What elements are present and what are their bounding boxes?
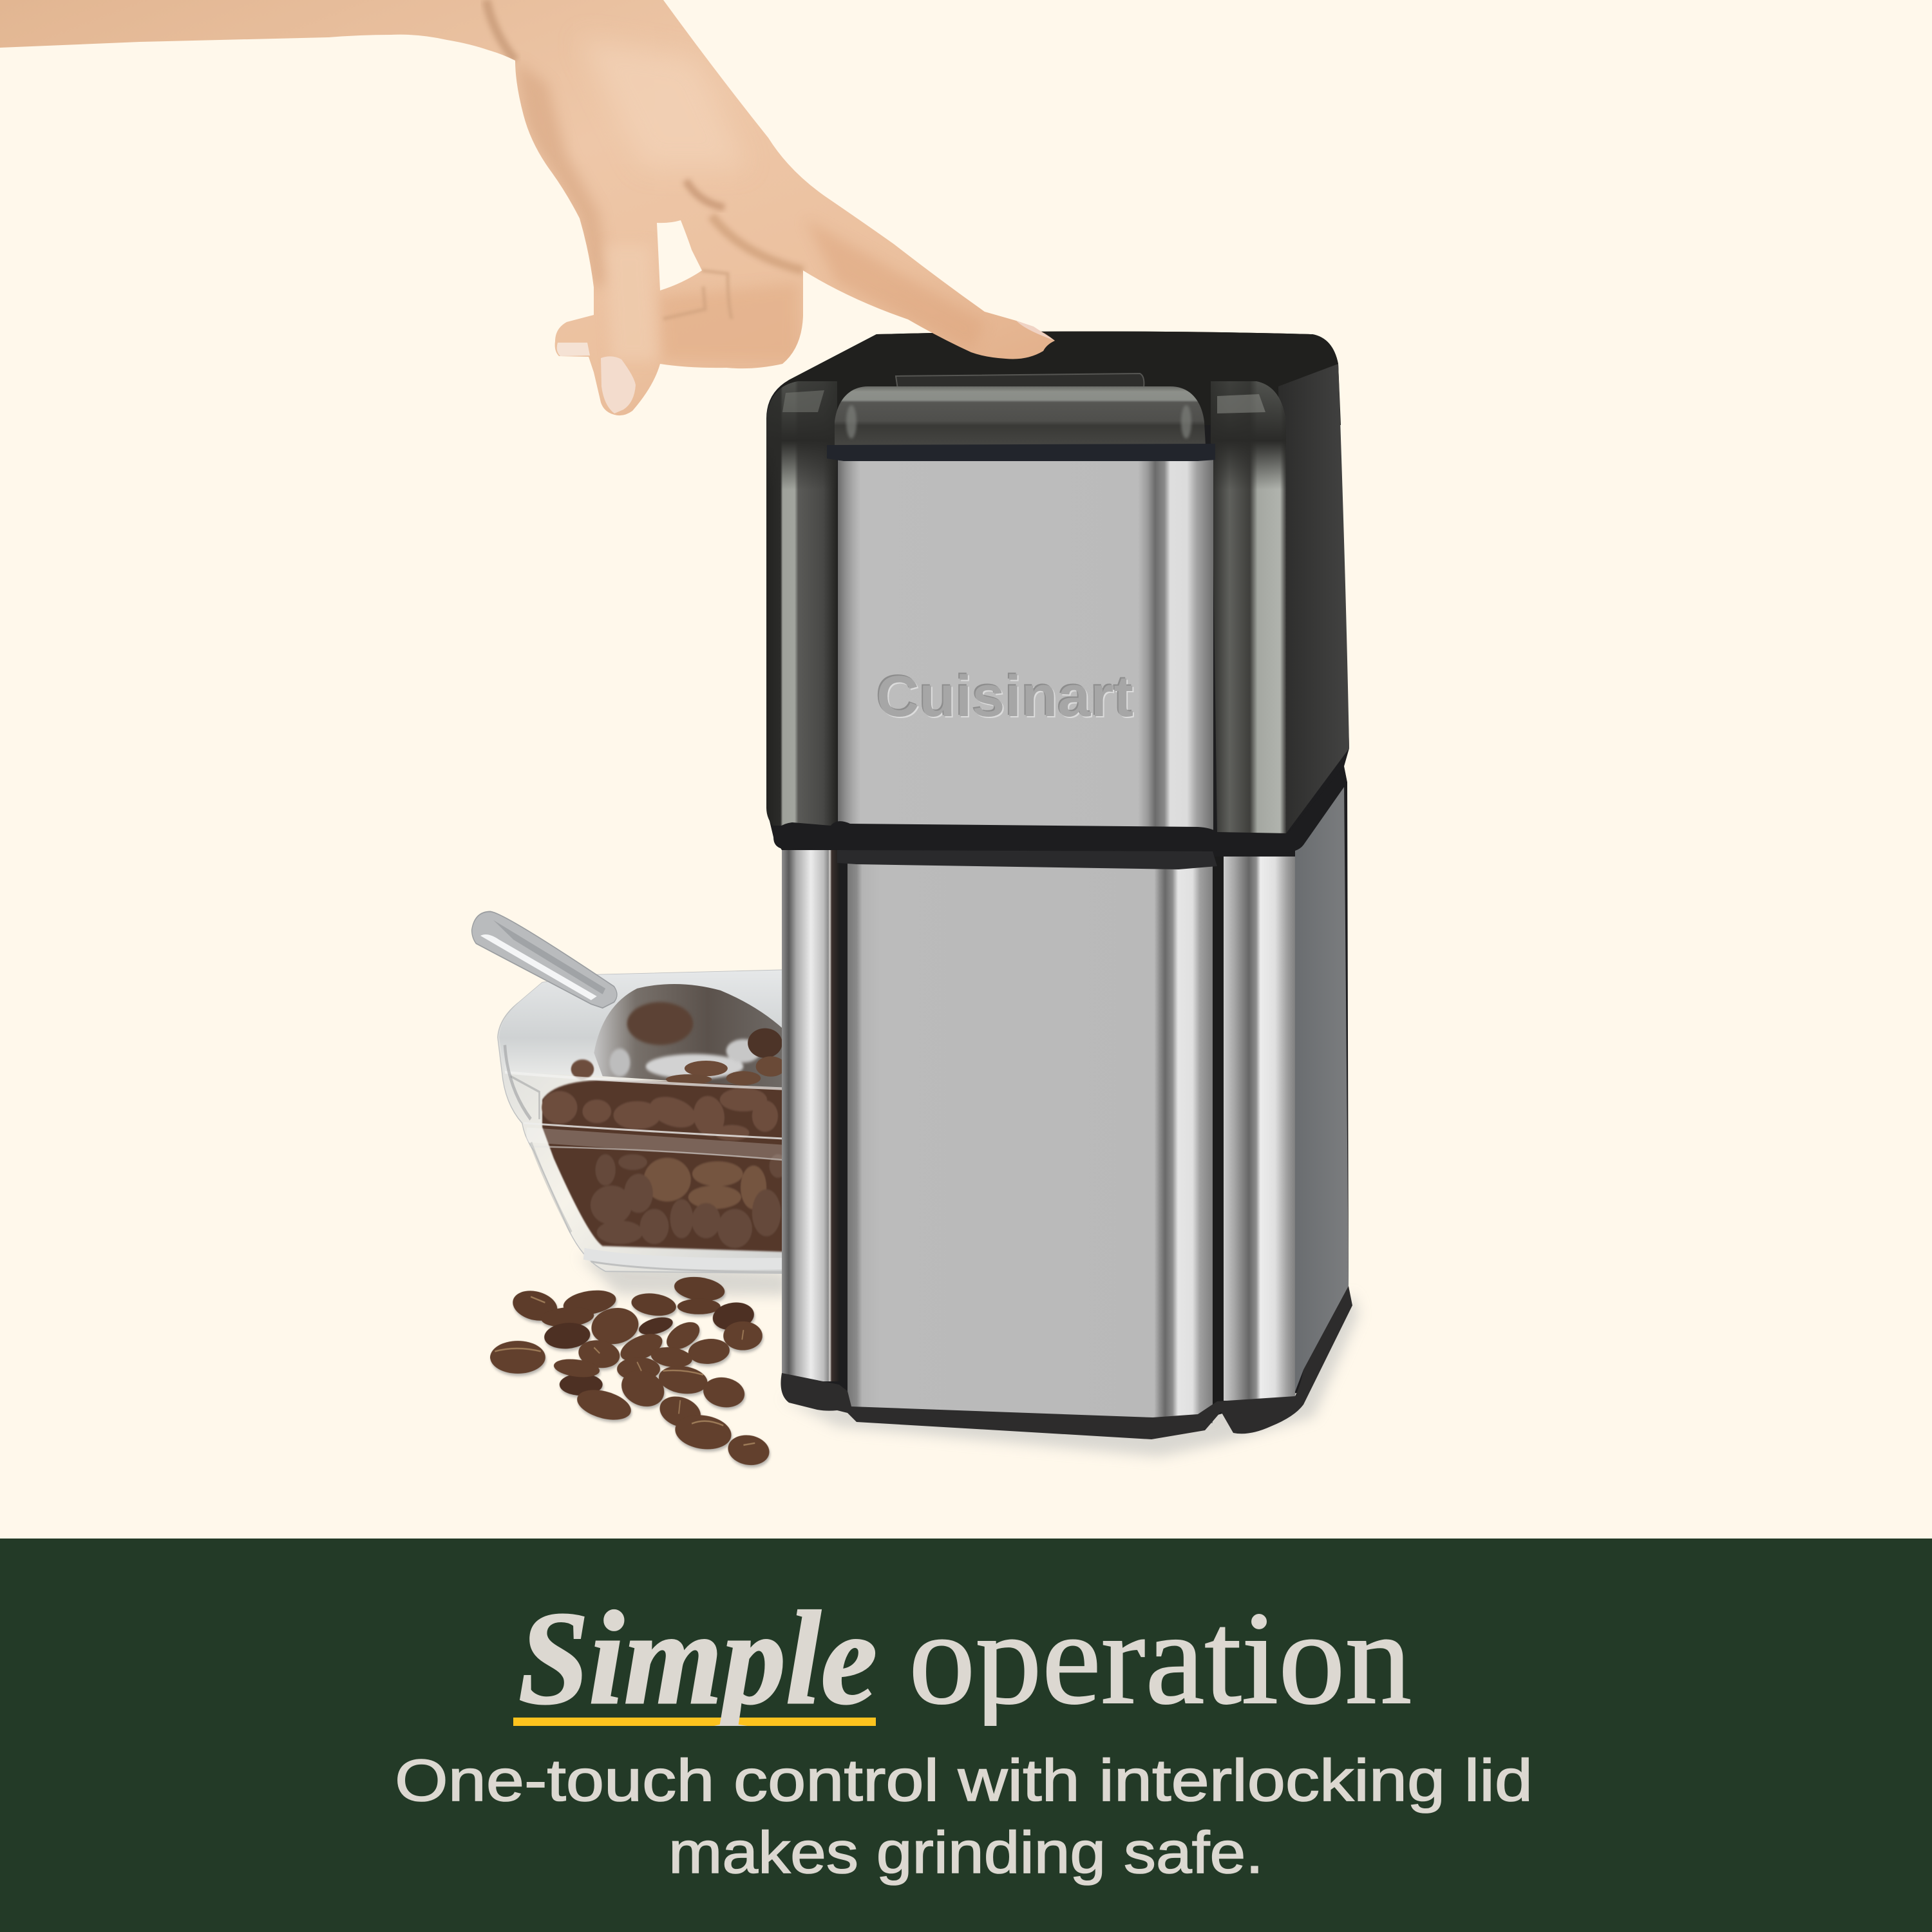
grinder lower right side xyxy=(1295,781,1349,1392)
bowl rim highlights xyxy=(505,1045,786,1272)
grinder upper housing: left column xyxy=(766,381,837,826)
caption band xyxy=(0,1539,1932,1932)
description line one: One-touch control with interlocking lid xyxy=(395,1748,1533,1814)
top button xyxy=(896,374,1144,389)
glass bowl with coffee beans and scoop xyxy=(472,911,788,1467)
metal scoop xyxy=(594,984,786,1088)
bowl upper inner wall xyxy=(499,970,784,1083)
grinder gap strip xyxy=(1213,857,1224,1407)
embossed brand name: Cuisinart xyxy=(876,665,1133,729)
column top reflections xyxy=(766,381,1286,489)
upper band xyxy=(827,444,1215,461)
shadow under grinder and bowl xyxy=(580,1256,1359,1457)
upper steel panel xyxy=(838,457,1213,837)
grinder upper housing: right side xyxy=(1278,364,1349,833)
heading underline xyxy=(513,1718,876,1726)
lower steel panel xyxy=(848,863,1213,1423)
heading emphasised word: Simple xyxy=(518,1584,877,1732)
hand soft shading xyxy=(486,0,985,361)
grinder lower left column xyxy=(782,850,840,1381)
long fingernail xyxy=(601,356,636,413)
index fingernail xyxy=(1016,321,1055,341)
dome corner highlights xyxy=(846,405,1191,439)
thumb nail xyxy=(557,343,590,356)
beans inside bowl xyxy=(542,1059,786,1252)
description text xyxy=(395,1748,1533,1886)
grinder upper housing: top plate xyxy=(766,331,1341,425)
grinder xyxy=(766,331,1352,1439)
heading regular word: operation xyxy=(909,1584,1412,1732)
scoop handle xyxy=(472,911,617,1008)
lid dome xyxy=(835,386,1206,446)
bowl glass body xyxy=(498,970,788,1273)
loose coffee beans xyxy=(490,1274,770,1467)
lower band xyxy=(837,850,1217,869)
grinder lower right column xyxy=(1223,857,1295,1401)
base xyxy=(781,1286,1352,1439)
grinder upper housing: right column xyxy=(1211,381,1286,833)
mid seam bands xyxy=(773,766,1347,853)
grinder dark backing silhouette xyxy=(766,331,1349,1417)
heading xyxy=(520,1609,1410,1726)
description line two: makes grinding safe. xyxy=(668,1820,1264,1886)
hand pressing the button xyxy=(0,0,1055,415)
arm and hand xyxy=(0,0,1055,415)
